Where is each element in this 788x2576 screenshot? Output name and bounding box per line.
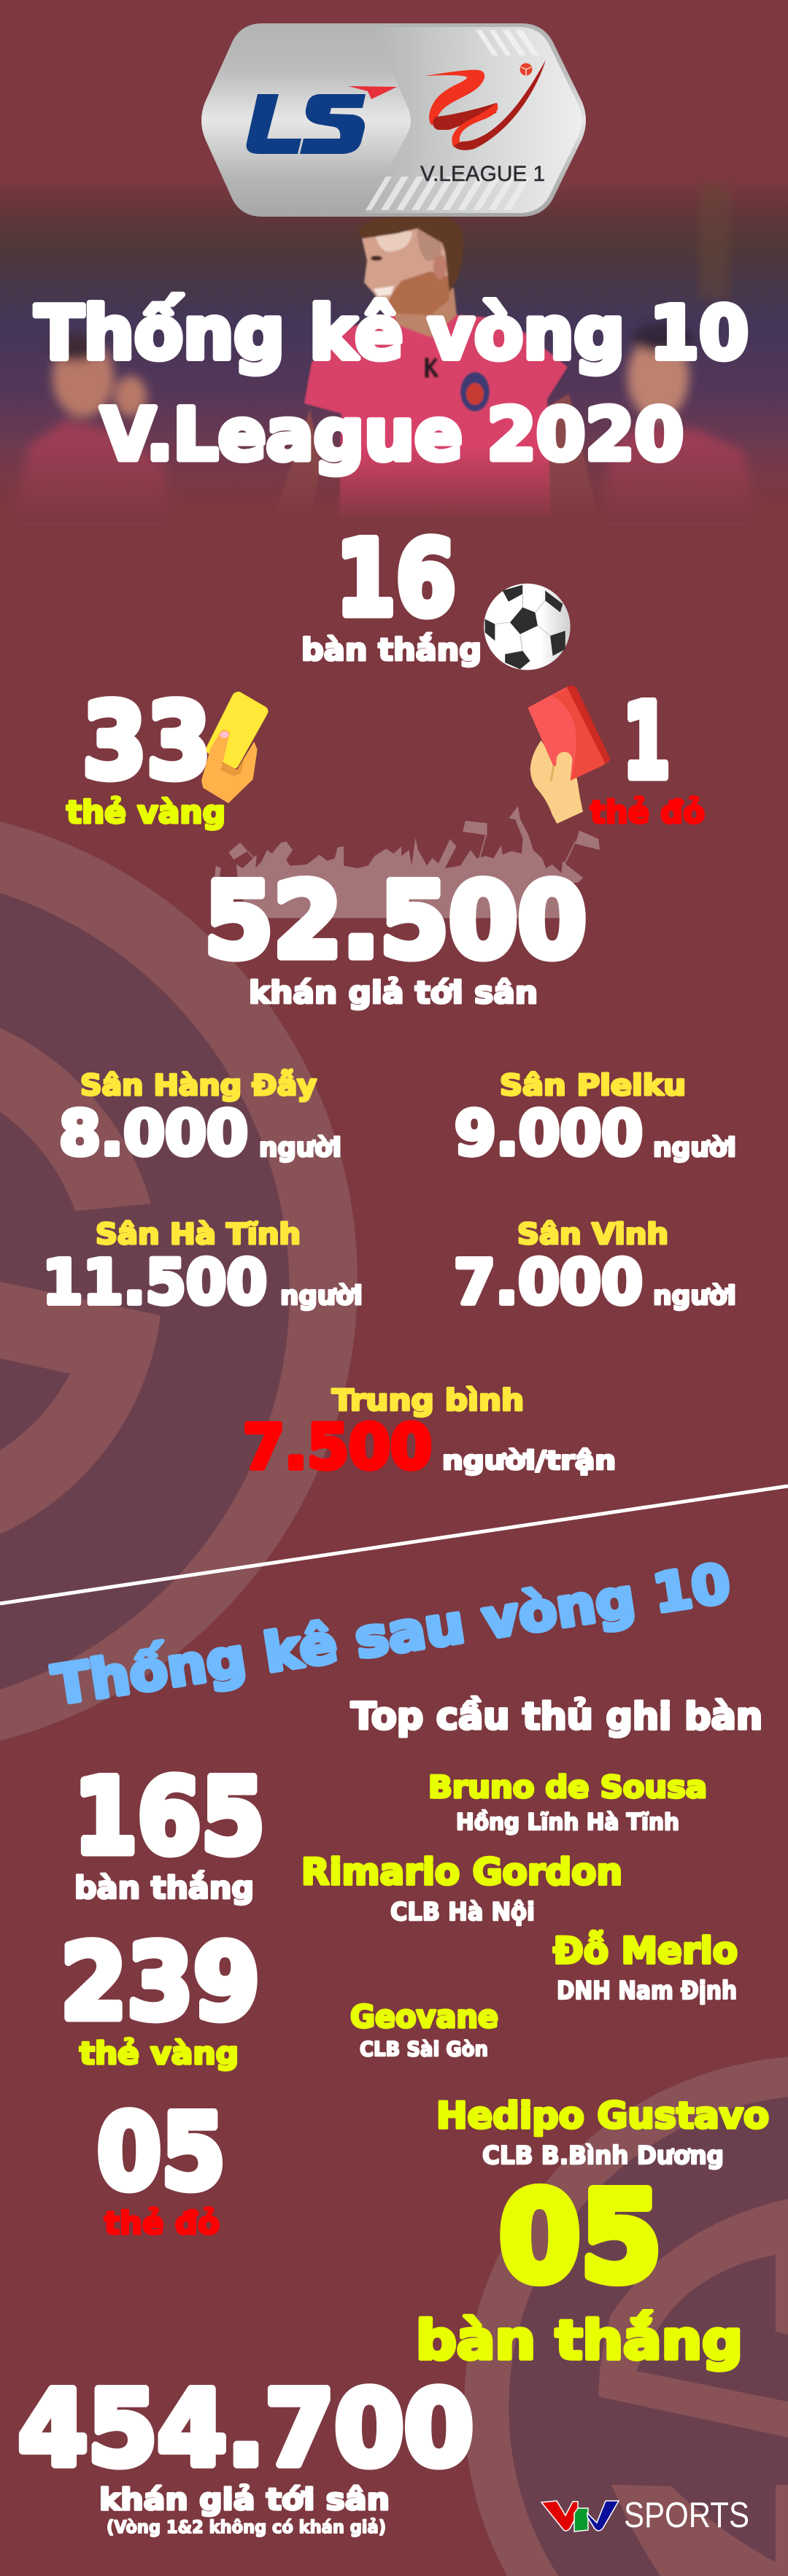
heading: top scorers: Top cầu thủ ghi bàn: [351, 1695, 762, 1738]
decorative emblem: left circle: [0, 821, 358, 1741]
stadium: Vinh: Sân Vinh: [517, 1218, 668, 1251]
stat: 16 goals: [301, 519, 482, 668]
decorative emblem: bottom-right circle: [464, 2057, 788, 2576]
scorer: Geovane: Geovane: [350, 1999, 498, 2035]
logo: VTV Sports: SPORTS: [624, 2496, 749, 2535]
scorer: Rimario Gordon: [301, 1851, 622, 1927]
stat: 52.500 spectators: khán giả tới sân: [249, 975, 538, 1010]
stat: average attendance: [243, 1384, 616, 1482]
red swoosh: [348, 86, 397, 99]
header photo: footballers: [0, 179, 788, 522]
scorer: Geovane: [350, 1999, 498, 2061]
logo: VTV Sports: [541, 2496, 749, 2535]
stadium: Pleiku: Sân Pleiku: [500, 1070, 686, 1102]
scorer: Bruno de Sousa: [428, 1769, 707, 1836]
stripes: [476, 30, 539, 55]
stadium: Hàng Đẫy: Sân Hàng Đẫy: [80, 1070, 317, 1102]
LS V.League 1 logo badge: V.LEAGUE 1: [420, 162, 545, 186]
stat: 16 goals: 16: [336, 519, 456, 639]
stat: 454.700 spectators: (Vòng 1&2 không có khán giả): [107, 2517, 386, 2537]
stat: 05 red cards: thẻ đỏ: [104, 2205, 220, 2242]
stat: average attendance: Trung bình: [332, 1384, 524, 1417]
scorer: Bruno de Sousa: Hồng Lĩnh Hà Tĩnh: [456, 1809, 679, 1836]
section heading: Thống kê sau vòng 10: [49, 1552, 735, 1717]
stadium: Pleiku: 9.000: [455, 1097, 643, 1169]
stat: 165 goals: bàn thắng: [74, 1870, 254, 1906]
stat: 33 yellow cards: thẻ vàng: [66, 794, 225, 831]
stat: 33 yellow cards: 33: [82, 681, 211, 802]
scorer: Hedipo Gustavo: CLB B.Bình Dương: [482, 2141, 724, 2170]
scorer: Đỗ Merlo: Đỗ Merlo: [553, 1930, 738, 1972]
icon: hand with yellow card: [201, 692, 268, 803]
scorer: Đỗ Merlo: [553, 1930, 738, 2006]
stadium: Hà Tĩnh: [42, 1218, 363, 1318]
scorer: Rimario Gordon: Rimario Gordon: [301, 1851, 622, 1893]
stat: 239 yellow cards: thẻ vàng: [80, 2035, 239, 2071]
stat: top scorer 05 goals: [416, 2165, 743, 2372]
stat: 1 red card: [590, 681, 705, 831]
section divider line: [0, 1486, 788, 1604]
stat: average attendance: người/trận: [442, 1446, 616, 1476]
stat: 05 red cards: 05: [97, 2092, 225, 2213]
stat: 52.500 spectators: 52.500: [204, 861, 587, 981]
title: V.League 2020: [101, 394, 684, 477]
scorer: Bruno de Sousa: Bruno de Sousa: [428, 1769, 707, 1805]
stadium: Vinh: 7.000: [454, 1246, 643, 1318]
stadium: Hàng Đẫy: người: [259, 1133, 341, 1163]
stadium: Hà Tĩnh: 11.500: [42, 1246, 267, 1318]
stat: 454.700 spectators: [18, 2369, 474, 2537]
stat: 454.700 spectators: khán giả tới sân: [99, 2482, 390, 2517]
W ribbon: [425, 70, 484, 125]
stadium: Vinh: [454, 1218, 736, 1318]
scorer: Hedipo Gustavo: Hedipo Gustavo: [436, 2095, 769, 2137]
stat: 454.700 spectators: 454.700: [18, 2369, 474, 2489]
LS letters: [247, 94, 301, 154]
stadium: Hàng Đẫy: 8.000: [59, 1097, 248, 1169]
stadium: Pleiku: người: [653, 1133, 736, 1163]
stadium: Hà Tĩnh: Sân Hà Tĩnh: [96, 1218, 301, 1251]
title: [35, 290, 749, 477]
stat: 165 goals: 165: [74, 1757, 265, 1877]
stadium: Pleiku: [455, 1070, 736, 1169]
stat: 239 yellow cards: 239: [61, 1922, 260, 2043]
scorer: Hedipo Gustavo: [436, 2095, 769, 2170]
stadium: Hà Tĩnh: người: [280, 1281, 363, 1311]
stat: 1 red card: thẻ đỏ: [590, 794, 705, 831]
LS V.League 1 logo badge: [201, 23, 586, 217]
stat: top scorer 05 goals: bàn thắng: [416, 2310, 743, 2372]
icon: hand with red card: [528, 686, 610, 824]
scorer: Geovane: CLB Sài Gòn: [360, 2037, 488, 2061]
scorer: Đỗ Merlo: DNH Nam Định: [557, 1976, 737, 2006]
scorer: Rimario Gordon: CLB Hà Nội: [390, 1898, 535, 1927]
crowd silhouette: [215, 806, 600, 918]
icon: football: [484, 584, 571, 670]
stat: 16 goals: bàn thắng: [301, 632, 482, 668]
stat: top scorer 05 goals: 05: [499, 2165, 662, 2309]
stadium: Vinh: người: [653, 1281, 736, 1311]
title: Thống kê vòng 10: [35, 290, 749, 376]
stadium: Hàng Đẫy: [59, 1070, 341, 1169]
stat: 1 red card: 1: [622, 681, 671, 802]
stat: average attendance: 7.500: [243, 1411, 432, 1482]
